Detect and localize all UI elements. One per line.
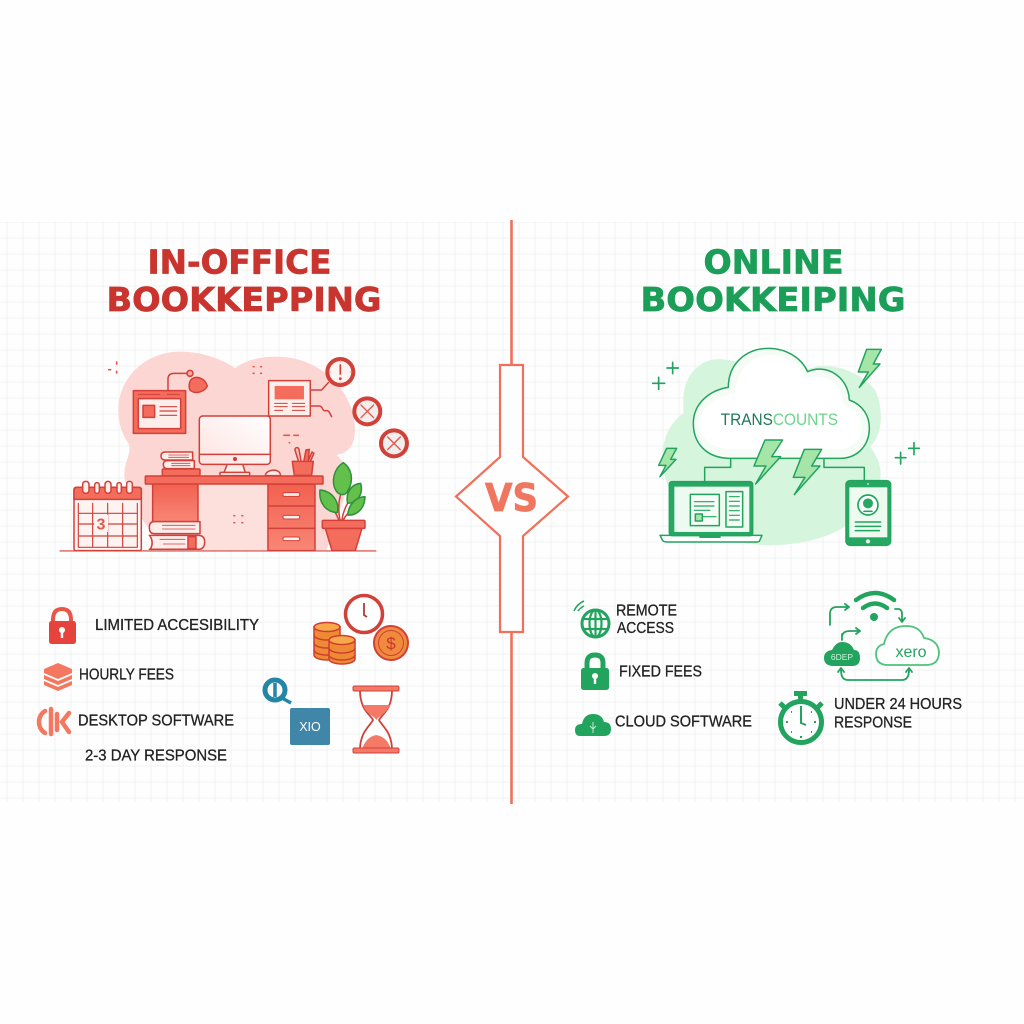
- icon: green padlock: [581, 655, 609, 690]
- icon group: coins and clock: [314, 596, 408, 664]
- desk lamp: [168, 370, 207, 392]
- right list: remote access: [574, 601, 677, 637]
- right list: remote access: REMOTE: [616, 603, 677, 620]
- icon: blue Q logo: [265, 680, 291, 703]
- right list: under 24 hours: [780, 691, 962, 742]
- heading: in-office bookkeeping: IN-OFFICE: [148, 242, 332, 282]
- clock badge: [325, 357, 355, 387]
- center divider with VS badge: [456, 220, 568, 804]
- illustration: cloud network: [653, 348, 919, 545]
- illustration: office desk scene: [60, 352, 409, 551]
- left list: 2-3 day response: 2-3 DAY RESPONSE: [85, 748, 227, 765]
- icon: hourglass: [353, 686, 399, 753]
- heading: in-office bookkeeping: BOOKKEPPING: [106, 280, 382, 319]
- right list: fixed fees: [581, 655, 702, 690]
- wall clock: [346, 596, 382, 632]
- right list: remote access: ACCESS: [617, 620, 674, 637]
- connector lines: [705, 459, 864, 482]
- left list: limited accessibility: LIMITED ACCESIBILITY: [95, 617, 259, 634]
- icon: filled cloud: [575, 714, 611, 736]
- mouse: [265, 470, 281, 476]
- green blob background: [663, 359, 881, 545]
- icon: stopwatch: [780, 691, 822, 742]
- tablet: [846, 481, 891, 545]
- pencil cup: [292, 448, 314, 475]
- left list: desktop software: [39, 709, 234, 734]
- error badge one: [352, 396, 382, 426]
- icon: stacked layers: [44, 663, 72, 691]
- left list: limited accessibility: [49, 609, 259, 644]
- heading: online bookkeiping: ONLINE: [704, 242, 844, 282]
- laptop: [660, 482, 762, 542]
- monitor: [199, 416, 270, 476]
- coin stack: [314, 622, 355, 664]
- icon: XIO tile: XIO: [299, 720, 321, 734]
- right list: fixed fees: FIXED FEES: [619, 664, 702, 681]
- floor books: [149, 522, 205, 549]
- sparkle marks: [109, 362, 298, 523]
- heading: online bookkeiping: [640, 242, 906, 319]
- heading: online bookkeiping: BOOKKEIPING: [640, 280, 906, 319]
- lightning bolts: [659, 349, 881, 495]
- wifi symbol: [856, 593, 894, 621]
- icon: globe with wifi: [574, 601, 609, 637]
- xero cloud: xero: [895, 644, 927, 661]
- filled cloud tile: 6DEP: [831, 652, 853, 662]
- document panel: [269, 381, 332, 417]
- error badge two: [379, 428, 409, 458]
- cloud wordmark: TRANSCOUNTS: [721, 410, 838, 429]
- calendar: 3: [97, 516, 106, 533]
- potted plant: [320, 463, 365, 551]
- cloud with wordmark: [693, 348, 869, 458]
- blob background: [118, 352, 355, 550]
- right list: cloud software: CLOUD SOFTWARE: [615, 714, 752, 731]
- right list: under 24 hours: UNDER 24 HOURS: [834, 696, 962, 713]
- wall window panel: [133, 391, 186, 433]
- dollar coin: $: [386, 634, 396, 653]
- left list: desktop software: DESKTOP SOFTWARE: [78, 713, 234, 730]
- icon: padlock: [49, 609, 76, 644]
- left list: hourly fees: [44, 663, 174, 691]
- VS label: VS: [485, 476, 538, 520]
- sync arrows: [830, 604, 912, 680]
- right list: under 24 hours: RESPONSE: [834, 715, 912, 732]
- icon group: wifi and xero sync: [824, 593, 939, 680]
- desk: [145, 476, 323, 551]
- icon: orange logo mark: [39, 709, 69, 734]
- floor line: [60, 549, 376, 553]
- stacked books on desk: [161, 452, 200, 476]
- left list: hourly fees: HOURLY FEES: [79, 666, 174, 684]
- calendar: [74, 481, 141, 551]
- icon: XIO tile: [290, 708, 330, 745]
- plus sparkles: [653, 362, 919, 464]
- right list: cloud software: [575, 714, 752, 736]
- heading: in-office bookkeeping: [106, 242, 382, 319]
